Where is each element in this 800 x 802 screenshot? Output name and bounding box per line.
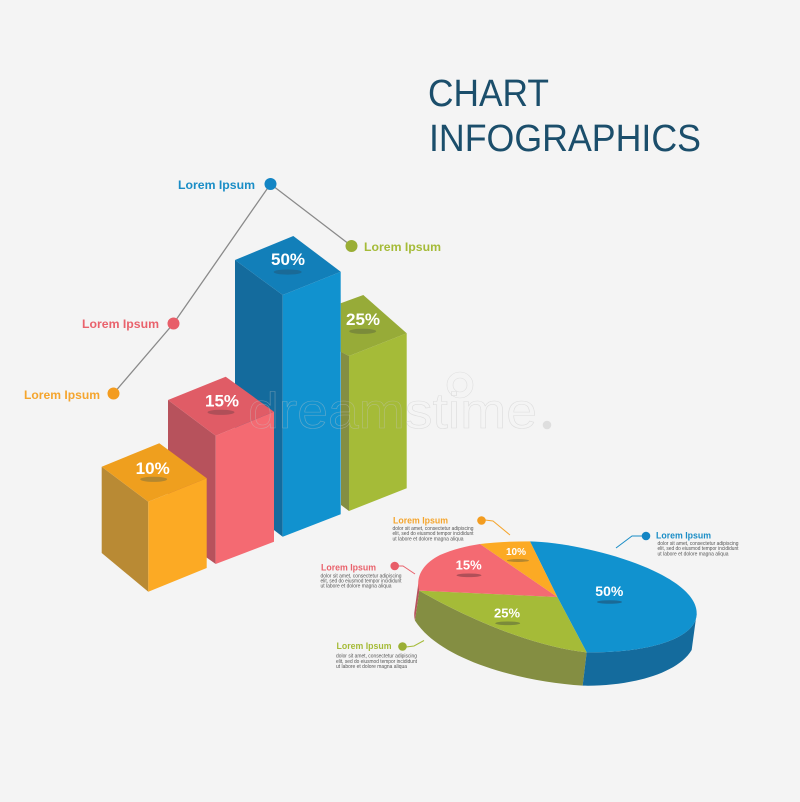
pie slices and sides bbox=[414, 541, 697, 686]
pie label: 25%: 25% bbox=[494, 606, 520, 621]
title: CHART bbox=[428, 73, 549, 115]
point: orange: Lorem Ipsum bbox=[24, 388, 100, 402]
callout: orange bbox=[392, 515, 510, 542]
line chart with labels bbox=[24, 178, 441, 402]
callout: green: ut labore et dolore magna aliqua bbox=[336, 664, 407, 670]
callout: orange: ut labore et dolore magna aliqua bbox=[392, 536, 464, 542]
callout: blue: ut labore et dolore magna aliqua bbox=[658, 551, 729, 557]
callout: orange: elit, sed do eiusmod tempor incididunt bbox=[392, 531, 474, 537]
callout: blue: Lorem Ipsum bbox=[656, 530, 711, 541]
bar: 50% blue: 50% bbox=[271, 250, 305, 269]
bar chart bbox=[102, 236, 407, 592]
title: INFOGRAPHICS bbox=[429, 118, 701, 160]
callout: red: dolor sit amet, consectetur adipiscing bbox=[320, 573, 402, 579]
bar: 10% orange: 10% bbox=[136, 459, 170, 478]
pie label: 10% bbox=[506, 547, 529, 562]
callout: red: elit, sed do eiusmod tempor incididunt bbox=[320, 578, 402, 584]
bar: 25% green bbox=[341, 295, 407, 511]
callout: orange: Lorem Ipsum bbox=[393, 515, 448, 526]
callout: orange: dolor sit amet, consectetur adipiscing bbox=[392, 526, 474, 532]
pie label: 10%: 10% bbox=[506, 547, 526, 558]
title bbox=[428, 73, 701, 160]
callout: red bbox=[320, 562, 415, 590]
point: blue: Lorem Ipsum bbox=[178, 178, 255, 192]
bar: 15% red: 15% bbox=[205, 392, 239, 411]
point: red: Lorem Ipsum bbox=[82, 317, 159, 331]
pie label: 15%: 15% bbox=[456, 557, 482, 572]
bar: 10% orange bbox=[102, 443, 207, 592]
callout: blue: dolor sit amet, consectetur adipiscing bbox=[658, 541, 739, 547]
callout: green: dolor sit amet, consectetur adipiscing bbox=[336, 654, 417, 660]
watermark: dreamstime bbox=[248, 383, 537, 439]
bar: 15% red bbox=[168, 377, 274, 564]
callout: green: elit, sed do eiusmod tempor incididunt bbox=[336, 659, 418, 665]
bar: 50% blue bbox=[235, 236, 341, 537]
callout: green: Lorem Ipsum bbox=[336, 641, 392, 652]
callout: red: Lorem Ipsum bbox=[321, 563, 376, 574]
callout: green bbox=[336, 640, 424, 670]
callout: blue bbox=[616, 530, 739, 557]
point: green: Lorem Ipsum bbox=[364, 240, 441, 254]
callout: blue: elit, sed do eiusmod tempor incididunt bbox=[658, 546, 739, 552]
pie label: 50%: 50% bbox=[595, 583, 624, 599]
pie chart bbox=[414, 541, 697, 686]
callout: red: ut labore et dolore magna aliqua bbox=[320, 584, 392, 590]
bar: 25% green: 25% bbox=[346, 310, 380, 329]
